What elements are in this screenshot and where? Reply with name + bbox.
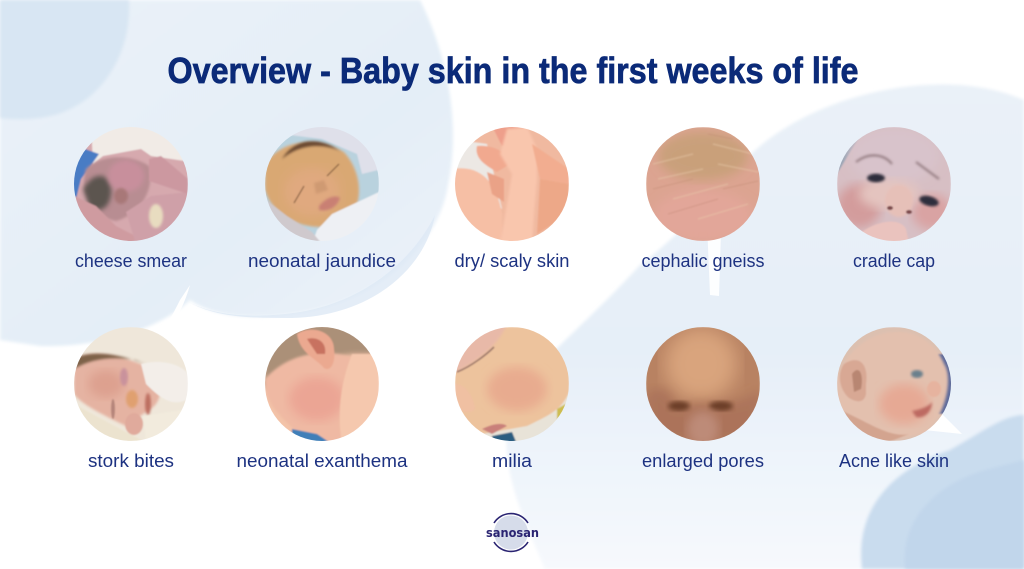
item: neonatal exanthema bbox=[236, 324, 409, 471]
item: dry scaly skin bbox=[452, 126, 570, 271]
item: enlarged pores bbox=[642, 327, 764, 471]
photo: dry scaly skin bbox=[452, 126, 569, 244]
item: cheese smear bbox=[71, 124, 191, 271]
label: stork bites: stork bites bbox=[88, 451, 174, 471]
label: neonatal jaundice: neonatal jaundice bbox=[248, 251, 396, 271]
label: neonatal exanthema: neonatal exanthema bbox=[236, 451, 409, 471]
label: enlarged pores: enlarged pores bbox=[642, 451, 764, 471]
item: acne like skin bbox=[837, 327, 954, 471]
photo: milia bbox=[452, 324, 569, 444]
photo: acne like skin bbox=[837, 327, 954, 444]
logo: sanosan: sanosan bbox=[486, 525, 539, 540]
item: stork bites bbox=[74, 327, 188, 471]
label: cradle cap: cradle cap bbox=[853, 251, 935, 271]
label: acne like skin: Acne like skin bbox=[839, 451, 949, 471]
label: cheese smear: cheese smear bbox=[75, 251, 187, 271]
title: Overview - Baby skin in the first weeks of life bbox=[168, 50, 858, 91]
photo: cheese smear bbox=[71, 124, 191, 244]
label: dry scaly skin: dry/ scaly skin bbox=[454, 251, 570, 271]
item: neonatal jaundice bbox=[248, 124, 396, 271]
photo: cephalic gneiss bbox=[646, 127, 760, 242]
photo: stork bites bbox=[74, 327, 188, 444]
photo: neonatal jaundice bbox=[265, 124, 382, 244]
photo: cradle cap bbox=[834, 124, 952, 244]
photo: neonatal exanthema bbox=[262, 324, 379, 444]
item: milia bbox=[452, 324, 569, 471]
item: cephalic gneiss bbox=[642, 127, 764, 271]
item: cradle cap bbox=[834, 124, 952, 271]
photo: enlarged pores bbox=[646, 327, 760, 447]
label: milia: milia bbox=[492, 451, 533, 471]
logo: sanosan bbox=[486, 514, 539, 551]
label: cephalic gneiss: cephalic gneiss bbox=[642, 251, 764, 271]
